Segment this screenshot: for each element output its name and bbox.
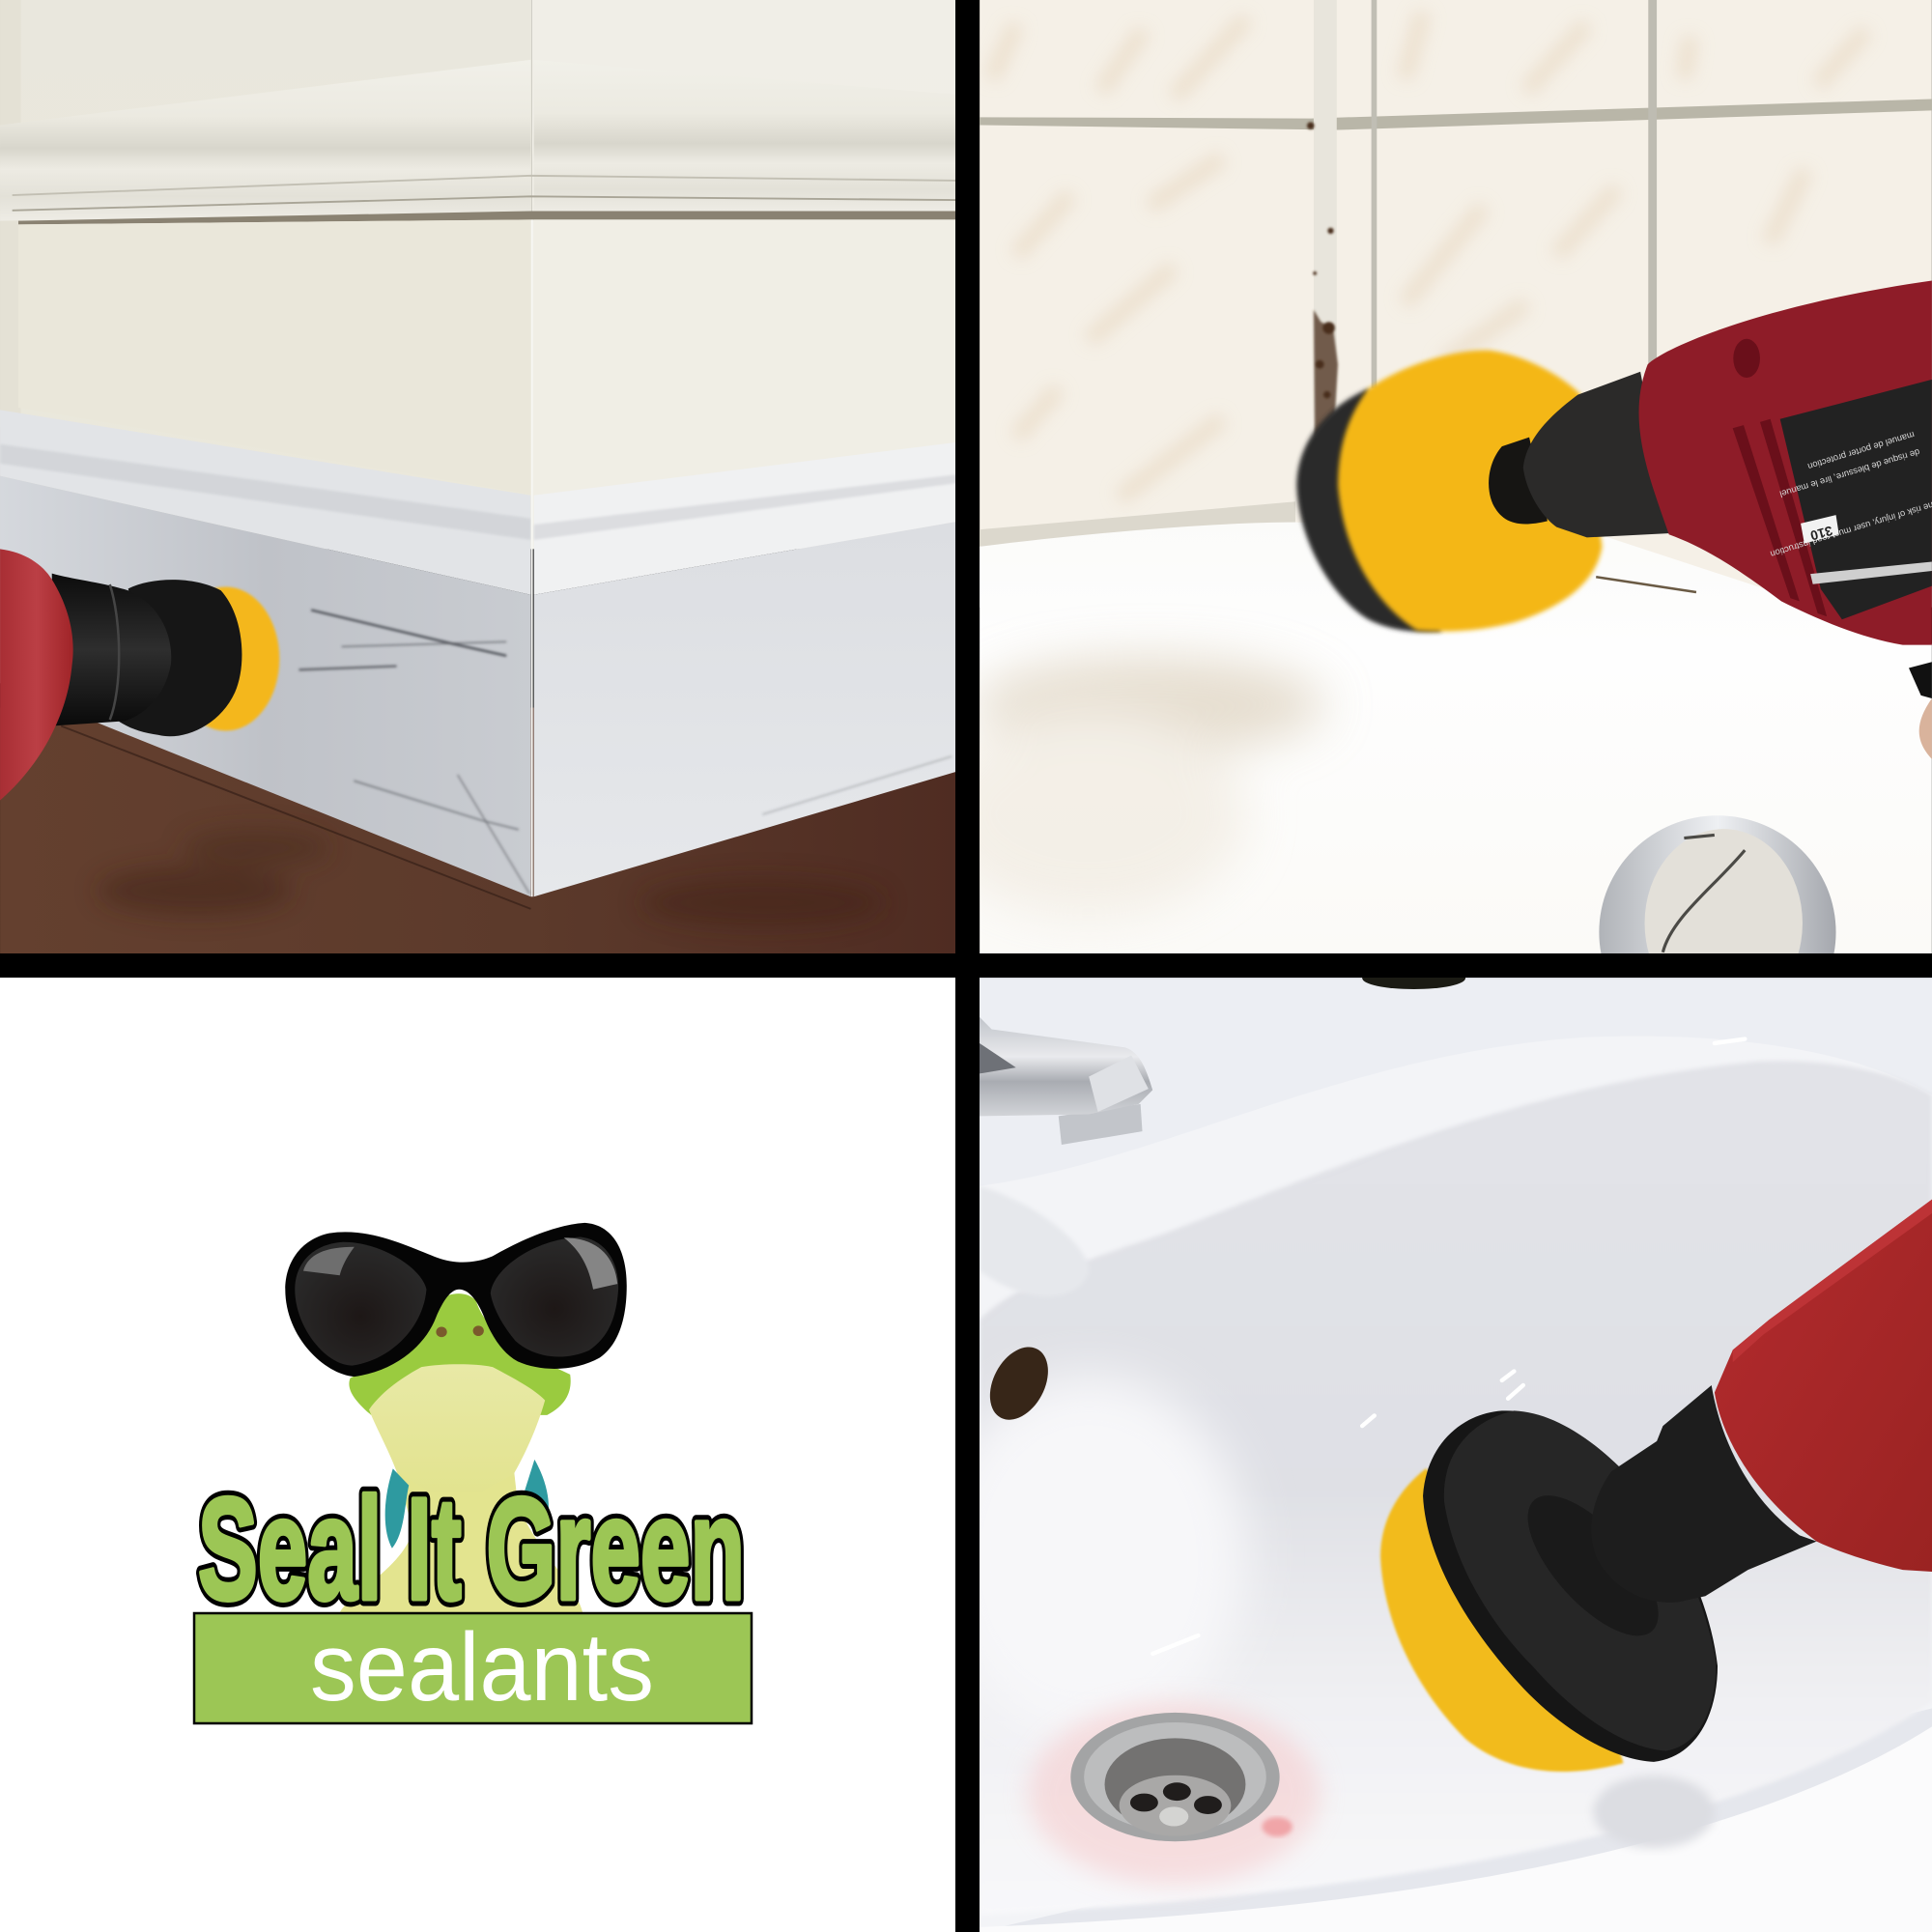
panel: scuffed baseboard xyxy=(0,0,955,953)
red stain spot xyxy=(1262,1817,1293,1836)
drill vent slits xyxy=(1733,419,1827,616)
brush ring mount xyxy=(1506,1475,1680,1657)
faucet dark reflection xyxy=(980,1043,1016,1073)
bowl left light xyxy=(931,1375,1247,1739)
tub body xyxy=(980,523,1932,953)
floor grain xyxy=(98,830,885,927)
panel: logo xyxy=(0,978,955,1932)
baseboard left top band xyxy=(0,410,530,595)
baseboard right shadow line xyxy=(534,474,956,540)
tile veins xyxy=(992,13,1866,498)
panel: sink cleaning xyxy=(980,978,1932,1932)
floor xyxy=(0,708,956,957)
left lens highlight xyxy=(303,1247,355,1275)
drill trigger xyxy=(1909,662,1932,698)
tub stain xyxy=(931,656,1325,917)
reflection of sponge xyxy=(1593,1776,1715,1848)
overflow hole xyxy=(979,1337,1060,1430)
backing disc face xyxy=(1444,1410,1716,1751)
drain hole three xyxy=(1194,1796,1222,1814)
moulding groove xyxy=(18,211,956,224)
far wall strip xyxy=(0,0,21,427)
drill: red body xyxy=(0,549,73,800)
chuck neck xyxy=(1489,438,1548,525)
right crown moulding xyxy=(534,60,956,213)
drill: collar ridge xyxy=(110,584,119,720)
drill red body xyxy=(1639,280,1932,645)
left wall xyxy=(0,0,532,549)
drill: brush sponge xyxy=(172,586,279,731)
lower wall right xyxy=(534,219,956,494)
overflow cover xyxy=(1599,815,1836,1049)
drain centre xyxy=(1159,1806,1188,1827)
teal shoulder left xyxy=(385,1468,409,1548)
overflow chrome ring xyxy=(1599,815,1836,1049)
vertical grout middle xyxy=(1372,0,1377,388)
sunglasses frame xyxy=(285,1223,627,1377)
label fine print: de risque de blessure, lire le manuel xyxy=(1778,447,1921,499)
silicone corner seam xyxy=(1314,0,1337,438)
scuff marks xyxy=(298,610,952,894)
drain ring highlight xyxy=(1084,1722,1266,1832)
floor shadow line xyxy=(61,725,530,909)
pink stain xyxy=(1028,1702,1320,1885)
basin bowl xyxy=(980,1061,1932,1915)
faucet xyxy=(980,1017,1152,1145)
left crown moulding xyxy=(0,60,530,221)
faucet aerator xyxy=(1059,1104,1143,1145)
mold stain xyxy=(1307,122,1338,438)
drill red body xyxy=(1715,1200,1932,1572)
logo bar xyxy=(194,1613,752,1723)
sponge black back xyxy=(1296,388,1441,632)
drill: collar xyxy=(52,574,171,725)
frog nostrils xyxy=(436,1326,447,1337)
left lens xyxy=(295,1242,426,1366)
logo sealants label: sealants xyxy=(310,1613,654,1721)
baseboard right face xyxy=(534,522,956,896)
drain xyxy=(1070,1713,1280,1841)
logo: frog mascot xyxy=(285,1223,627,1613)
moulding thin groove xyxy=(13,176,956,195)
frog nostril right xyxy=(473,1325,484,1336)
panel: tub grout cleaning xyxy=(980,0,1932,953)
frog throat xyxy=(369,1364,545,1492)
sponge xyxy=(1380,1468,1624,1772)
stopper black base xyxy=(1362,967,1465,989)
drill collar xyxy=(1591,1385,1817,1603)
label bottom stripe xyxy=(1810,562,1932,584)
baseboard left face xyxy=(0,476,530,896)
basin rim xyxy=(980,1037,1932,1932)
label fine print: manuel de porter protection xyxy=(1806,430,1916,472)
faucet body xyxy=(980,1017,1152,1116)
model badge xyxy=(1801,515,1839,544)
drain plate xyxy=(1120,1776,1231,1836)
teal shoulder right xyxy=(524,1460,549,1522)
backing disc edge xyxy=(1423,1410,1718,1762)
right lens xyxy=(491,1236,618,1357)
faucet front highlight xyxy=(1089,1056,1149,1112)
frog neck and legs xyxy=(340,1467,582,1613)
sponge yellow face xyxy=(1338,351,1603,632)
drill top highlight xyxy=(1733,1200,1932,1362)
logo wordmark xyxy=(198,1467,745,1630)
frog head xyxy=(349,1293,571,1415)
drain hole one xyxy=(1130,1794,1158,1811)
right lens highlight xyxy=(564,1237,617,1290)
overflow reflection xyxy=(1645,829,1803,1017)
sink deck xyxy=(980,978,1932,1932)
baseboard right top band xyxy=(534,442,956,595)
basin highlights xyxy=(1152,1039,1745,1654)
drain hole two xyxy=(1163,1782,1191,1801)
overflow dark cable xyxy=(1662,835,1745,952)
drill collar xyxy=(1523,372,1671,537)
drain ring xyxy=(1070,1713,1280,1841)
corner edge xyxy=(530,219,533,896)
ledge dirt xyxy=(1596,577,1696,592)
drill side vent hole xyxy=(1733,339,1760,378)
front rim xyxy=(980,1726,1932,1932)
vertical grout right xyxy=(1648,0,1657,364)
overflow recess xyxy=(980,1186,1089,1296)
lower wall left xyxy=(18,219,530,494)
moulding lower groove xyxy=(13,196,956,211)
drain inner xyxy=(1105,1738,1245,1831)
drill: backing disc xyxy=(110,580,242,736)
wordmark outline: Seal It Green xyxy=(198,1467,745,1630)
right wall xyxy=(532,0,959,549)
logo background xyxy=(0,978,955,1932)
baseboard left shadow line xyxy=(0,444,530,540)
drill label plate xyxy=(1780,380,1932,619)
wordmark fill: Seal It Green xyxy=(198,1467,745,1630)
model badge text: 310 xyxy=(1808,524,1834,544)
horizontal grout xyxy=(980,99,1932,130)
tub sealant strip xyxy=(980,501,1295,548)
hand xyxy=(1919,698,1932,759)
tile wall xyxy=(980,0,1932,608)
label model number xyxy=(1801,515,1839,544)
label fine print xyxy=(1747,430,1932,560)
deck highlight xyxy=(980,980,1932,1186)
